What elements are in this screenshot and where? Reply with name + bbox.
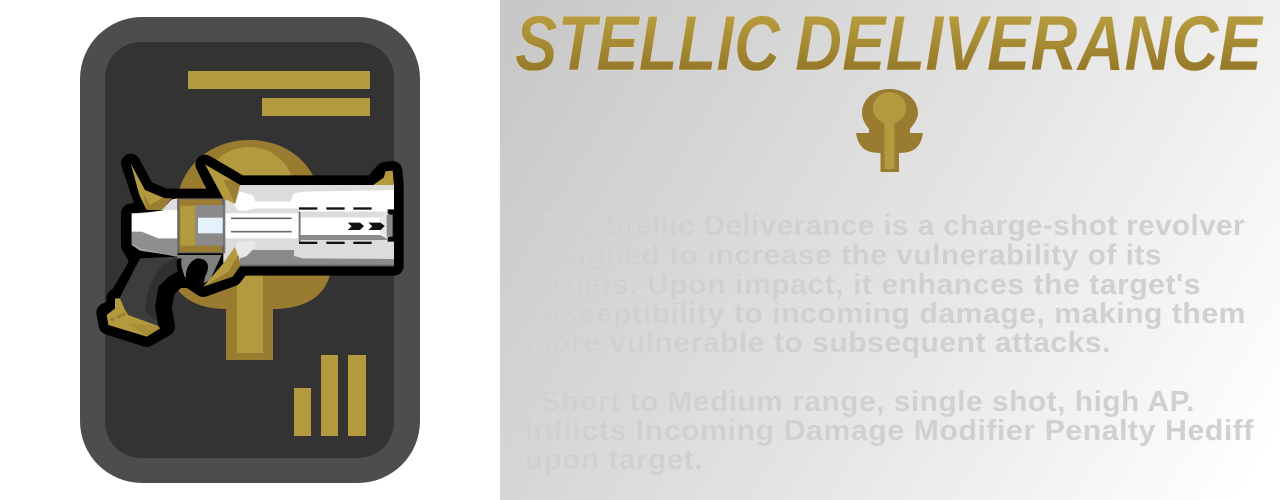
text block: stats: upon target.	[525, 444, 703, 476]
gun outline	[106, 163, 394, 337]
barrel	[223, 185, 394, 266]
text block: stats	[525, 386, 1254, 476]
icon: small emblem	[856, 89, 923, 172]
card inner	[105, 42, 394, 458]
muzzle cap	[387, 209, 402, 242]
receiver	[177, 198, 224, 253]
trigger	[177, 258, 208, 293]
rear frame	[132, 198, 177, 257]
gold spikes	[131, 163, 394, 287]
text block: description: targets. Upon impact, it enhances the target's	[525, 269, 1201, 301]
card stat bars	[294, 355, 366, 436]
card frame	[80, 17, 420, 483]
text block: stats: Inflicts Incoming Damage Modifier Penalty Hediff	[525, 415, 1254, 447]
panel: description background	[500, 0, 1280, 500]
title	[515, 0, 1264, 87]
trigger guard	[177, 255, 222, 283]
text block: description: The Stellic Deliverance is a charge-shot revolver	[542, 210, 1245, 242]
barrel chevrons	[348, 223, 385, 230]
text block: stats: Short to Medium range, single shot, high AP.	[540, 386, 1195, 418]
text block: description: susceptibility to incoming damage, making them	[525, 298, 1246, 330]
title: STELLIC	[515, 0, 781, 87]
grip foot	[107, 298, 160, 337]
text block: description	[525, 210, 1246, 359]
card top bars	[188, 71, 370, 116]
panel: weapon card	[80, 17, 420, 483]
text block: description: designed to increase the vulnerability of its	[525, 240, 1162, 272]
grip	[119, 257, 177, 326]
text block: description: more vulnerable to subsequent attacks.	[525, 327, 1111, 359]
barrel dashes	[299, 207, 372, 244]
icon: large emblem	[169, 140, 331, 360]
icon: revolver	[106, 163, 402, 337]
